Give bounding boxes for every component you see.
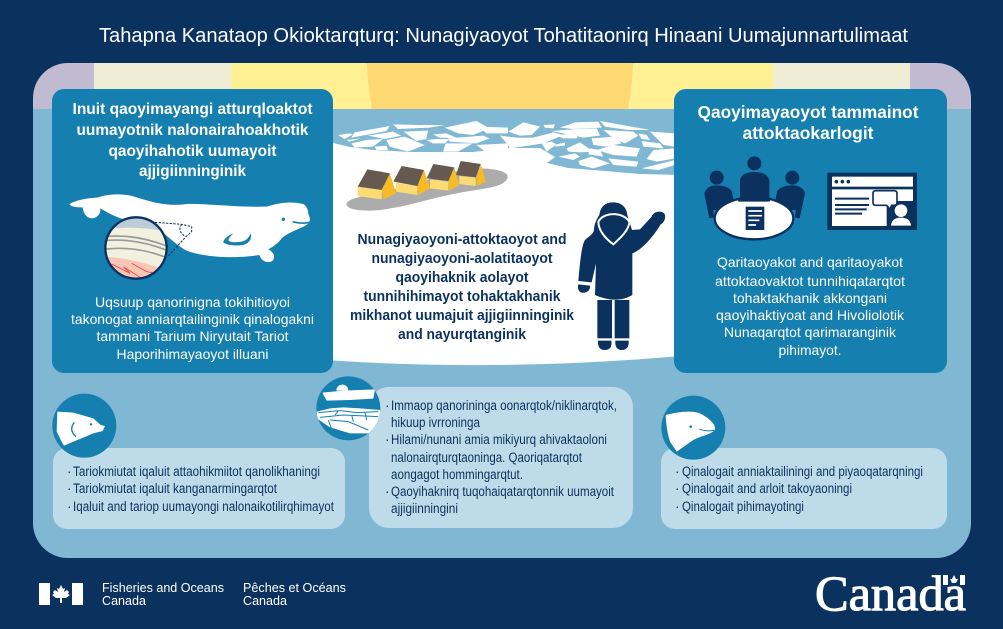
center text: tunnihihimayot tohaktakhanik xyxy=(364,289,561,305)
bubble: beluga list: Qinalogait pihimayotingi xyxy=(682,499,804,514)
bubble: fish list: Tariokmiutat iqaluit attaohikmiitot qanolikhaningi xyxy=(73,464,320,479)
bubble: environment list: · xyxy=(385,398,390,413)
bubble: beluga list: Qinalogait and arloit takoyaoningi xyxy=(682,481,852,496)
sea ice left xyxy=(338,121,508,152)
bubble: fish list: · xyxy=(67,499,72,514)
center text xyxy=(350,232,575,343)
right body text: attoktaovaktot tunnihiqatarqtot xyxy=(715,273,905,289)
bubble: beluga list: · xyxy=(675,481,680,496)
icon: fish xyxy=(52,394,116,458)
bubble: environment list: Immaop qanorininga oonarqtok/niklinarqtok, xyxy=(391,398,617,413)
left body text xyxy=(71,294,314,362)
footer: department name English xyxy=(102,581,224,608)
footer: department name French xyxy=(243,581,346,608)
left heading: ajjigiinninginik xyxy=(139,163,246,180)
right body text: pihimayot. xyxy=(778,342,842,358)
left body text: tammani Tarium Niryutait Tariot xyxy=(96,328,289,344)
bubble: environment list: · xyxy=(385,432,390,447)
sea ice right xyxy=(500,121,675,170)
bubble: environment list: Hilami/nunani amia mikiyurq ahivaktaoloni xyxy=(391,432,607,447)
right heading: Qaoyimayaoyot tammainot xyxy=(698,102,919,122)
left heading xyxy=(72,101,313,180)
bubble: environment list: nalonairqturqtaoninga. Qaoriqatarqtot xyxy=(391,450,582,465)
icon: sun over sea ice xyxy=(316,376,380,440)
left body text: takonogat anniarqtailinginik qinalogakni xyxy=(71,311,314,327)
footer: department name English: Canada xyxy=(102,594,146,608)
footer: Government of Canada flag symbol xyxy=(39,583,83,605)
houses xyxy=(347,161,508,211)
bubble: fish list xyxy=(53,448,345,529)
bubble: fish list: · xyxy=(67,464,72,479)
bubble: environment list xyxy=(369,387,633,528)
water xyxy=(33,109,971,558)
bubble: environment list: hikuup ivrroninga xyxy=(391,415,480,430)
icon: beluga whale with magnified skin xyxy=(69,194,310,282)
right body text xyxy=(715,254,905,358)
bubble: fish list: Tariokmiutat iqaluit kanganarmingarqtot xyxy=(73,481,277,496)
right body text: Qaritaoyakot and qaritaoyakot xyxy=(717,254,903,270)
center text: qaoyihaknik aolayot xyxy=(396,270,529,286)
title: Tahapna Kanataop Okioktarqturq: Nunagiyaoyot Tohatitaonirq Hinaani Uumajunnartulimaat xyxy=(99,25,908,47)
center text: and nayurqtanginik xyxy=(398,327,527,343)
right body text: Nunaqarqtot qarimaranginik xyxy=(724,324,897,340)
footer: Canada wordmark: Canada xyxy=(815,565,966,621)
bubble: fish list: Iqaluit and tariop uumayongi nalonaikotilirqhimayot xyxy=(73,499,334,514)
bubble: beluga list: · xyxy=(675,464,680,479)
bubble: beluga list: · xyxy=(675,499,680,514)
left body text: Uqsuup qanorinigna tokihitioyoi xyxy=(95,294,290,310)
left heading: qaoyihahotik uumayoit xyxy=(108,143,277,160)
icon: beluga head xyxy=(661,396,725,460)
left heading: Inuit qaoyimayangi atturqloaktot xyxy=(72,101,313,118)
right heading xyxy=(698,102,919,143)
bubble: beluga list: Qinalogait anniaktailiningi and piyaoqatarqningi xyxy=(682,464,923,479)
panel: left xyxy=(52,89,333,373)
footer: department name French: Pêches et Océans xyxy=(243,581,346,595)
bubble: environment list: aongagot hommingarqtut. xyxy=(391,467,523,482)
left heading: uumayotnik nalonairahoakhotik xyxy=(76,122,309,139)
main scene panel xyxy=(33,63,971,558)
right body text: qaoyihaktiyoat and Hivoliolotik xyxy=(716,307,905,323)
right heading: attoktaokarlogit xyxy=(742,123,874,143)
sky bands and sun xyxy=(33,63,971,109)
bubble: environment list: ajjigiinningini xyxy=(391,501,458,516)
bubble: fish list: · xyxy=(67,481,72,496)
left body text: Haporihimayaoyot illuani xyxy=(116,346,268,362)
footer: department name French: Canada xyxy=(243,594,287,608)
panel: right xyxy=(674,89,947,373)
center text: mikhanot uumajuit ajjigiinninginik xyxy=(350,308,575,324)
snow field xyxy=(325,141,680,365)
bubble: environment list: · xyxy=(385,484,390,499)
bubble: environment list: Qaoyihaknirq tuqohaiqatarqtonnik uumayoit xyxy=(391,484,614,499)
right body text: tohaktakhanik akkongani xyxy=(733,290,887,306)
center text: nunagiyaoyoni-aolatitaoyot xyxy=(372,251,553,267)
center text: Nunagiyaoyoni-attoktaoyot and xyxy=(358,232,566,248)
footer: department name English: Fisheries and Oceans xyxy=(102,581,224,595)
icon: person waving xyxy=(578,202,665,350)
bubble: beluga list xyxy=(661,448,947,529)
icon: meeting around table xyxy=(704,156,805,239)
icon: webinar window xyxy=(827,173,917,230)
